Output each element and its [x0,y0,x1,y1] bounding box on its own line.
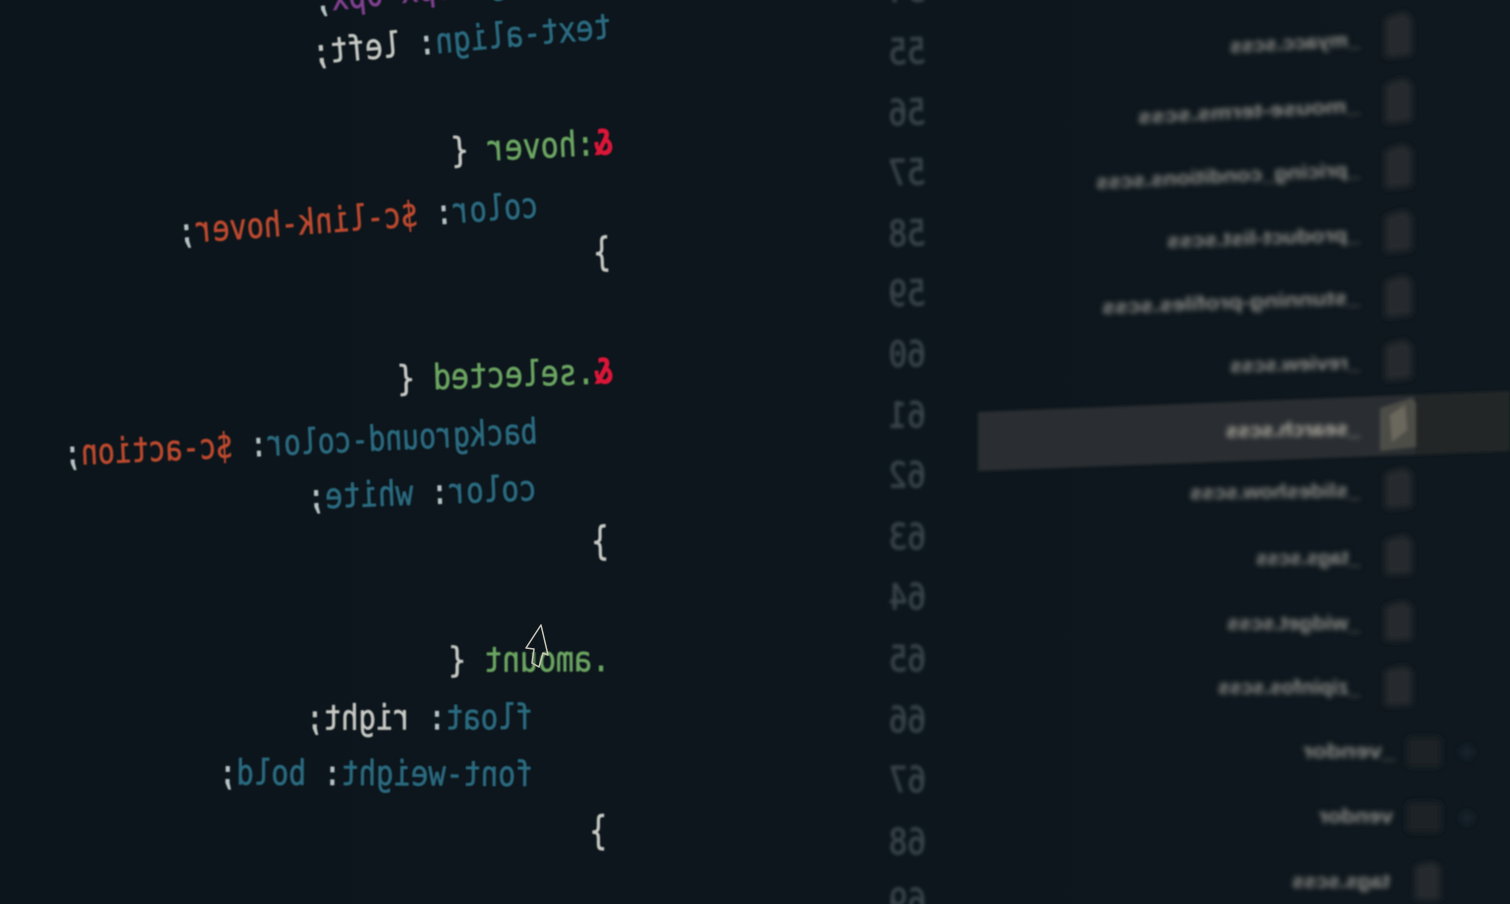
file name: _tags.scss [1256,547,1361,570]
code line: selected selector: &.selected { [396,351,613,399]
panel: file tree icons [1385,12,1474,900]
file name: _zipinfos.scss [1218,677,1361,699]
line number 61: 61 [888,394,926,436]
folder name: _vendor [1303,741,1396,763]
line number 57: 57 [888,151,926,194]
file name: tags.scss [1292,871,1390,893]
folder name: vendor [1319,806,1393,828]
line number 63: 63 [889,516,926,558]
code line: font weight: font-weight: bold; [219,752,533,795]
selected row highlight [978,391,1510,471]
icon: file [1385,340,1412,381]
line number 56: 56 [888,91,926,134]
icon: file [1385,666,1412,706]
code line: float: float: right; [306,696,533,738]
icon: mouse cursor [526,625,548,667]
file name: _widget.scss [1227,613,1361,635]
line number 59: 59 [888,272,926,315]
code line: amount selector: .amount { [448,639,610,680]
line number 65: 65 [889,638,926,680]
icon: folder [1407,737,1441,767]
line number 58: 58 [888,212,926,255]
icon: file [1385,468,1412,509]
code line: closing brace: } [592,230,611,276]
line number 68: 68 [889,821,926,863]
code line: closing brace: } [591,519,609,565]
icon: expand arrow [1460,811,1474,825]
file name: _mouse-terms.scss [1137,95,1361,129]
code line: background colour: background-color: $c-action; [63,412,538,474]
icon: file [1385,78,1412,124]
code line: white colour: color: white; [307,468,537,517]
icon: file [1385,601,1412,641]
line number 60: 60 [888,333,926,375]
line number 62: 62 [888,454,926,496]
file name: _review.scss [1230,352,1361,377]
file name: selected: _search.scss [1226,418,1361,442]
panel: line numbers [888,0,926,904]
file name: _slideshow.scss [1190,480,1361,504]
line number 55: 55 [888,30,926,73]
line number 67: 67 [889,759,926,801]
line number 64: 64 [889,576,926,618]
icon: folder [1407,802,1441,832]
code line: closing brace: } [590,809,607,854]
icon: file [1385,144,1412,189]
code line: hover selector: &:hover { [450,122,613,171]
line number 66: 66 [889,699,926,741]
file name: _myacc.scss [1229,29,1361,58]
code line: text-align: text-align: left; [311,6,613,73]
icon: file [1385,535,1412,575]
icon: file [1385,210,1412,253]
icon: selected file [1380,398,1416,451]
file name: _product-list.scss [1167,224,1361,253]
file name: _stunning-profiles.scss [1102,287,1361,319]
file name: _pricing_conditions.scss [1095,159,1361,194]
panel: file tree names [1095,29,1396,893]
code line: link colour: color: $c-link-hover; [176,184,540,252]
icon: expand arrow [1460,745,1474,759]
panel: code column [63,0,613,854]
icon: file [1385,12,1412,58]
icon: file [1415,862,1440,900]
icon: file [1385,275,1412,318]
